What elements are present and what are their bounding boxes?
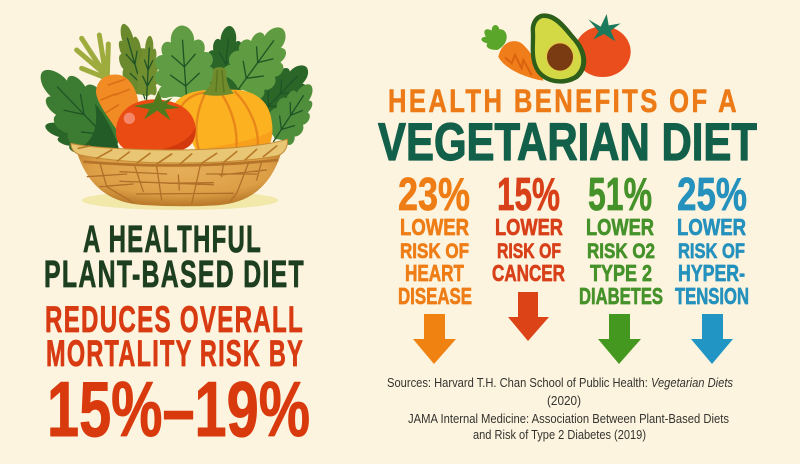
- subheading: reduces overall mortality risk by: MORTALITY RISK BY: [46, 333, 304, 374]
- icon: carrot, avocado and tomato: [481, 13, 631, 84]
- sources: [387, 376, 733, 442]
- stat column: hypertension: RISK OF: [678, 240, 745, 263]
- arrow: red down: [508, 292, 549, 341]
- arrow: green down: [598, 314, 641, 364]
- leafy greens: [21, 13, 326, 172]
- sources: (2020): [547, 394, 581, 408]
- carrot greens: [77, 35, 108, 79]
- heading: a healthful plant-based diet: PLANT-BASED DIET: [44, 254, 305, 296]
- subheading: reduces overall mortality risk by: [45, 299, 304, 374]
- heading: a healthful plant-based diet: A HEALTHFUL: [83, 219, 262, 261]
- basket bowl: [77, 152, 282, 206]
- basket shadow: [82, 191, 278, 210]
- stat column: hypertension: TENSION: [675, 283, 749, 309]
- stat column: heart disease: [398, 168, 472, 364]
- basket rim: [71, 139, 287, 164]
- arrow: orange down: [413, 314, 456, 364]
- sources: JAMA Internal Medicine: Association Between Plant-Based Diets: [408, 412, 729, 426]
- arrow: blue down: [691, 314, 733, 364]
- stat column: cancer: RISK OF: [497, 240, 561, 263]
- stat column: hypertension: LOWER: [677, 214, 746, 240]
- sources: Sources: Harvard T.H. Chan School of Public Health: Vegetarian Diets: [387, 376, 733, 390]
- big stat: 15%-19%: 15%–19%: [47, 365, 310, 453]
- heading: a healthful plant-based diet: [44, 219, 305, 296]
- stat column: heart disease: HEART: [405, 260, 464, 286]
- stat column: hypertension: 25%: [677, 168, 747, 220]
- stat column: cancer: CANCER: [492, 260, 565, 286]
- carrot: [96, 74, 138, 130]
- stat column: type 2 diabetes: DIABETES: [579, 283, 663, 309]
- stat column: hypertension: HYPER-: [678, 260, 745, 286]
- stat column: cancer: 15%: [497, 168, 560, 220]
- carrot: [481, 25, 543, 81]
- stat column: type 2 diabetes: [579, 168, 663, 364]
- pumpkin: [175, 67, 272, 152]
- stat column: heart disease: 23%: [398, 168, 470, 220]
- stat column: hypertension: [675, 168, 749, 364]
- stat column: heart disease: DISEASE: [398, 283, 472, 309]
- stat column: type 2 diabetes: LOWER: [586, 214, 654, 240]
- tomato: [116, 91, 196, 152]
- stat column: type 2 diabetes: 51%: [588, 168, 652, 220]
- stat column: cancer: LOWER: [495, 214, 563, 240]
- stat column: type 2 diabetes: TYPE 2: [590, 260, 652, 286]
- stat column: cancer: [492, 168, 565, 341]
- stat column: type 2 diabetes: RISK O2: [587, 240, 655, 263]
- stat column: heart disease: LOWER: [400, 214, 469, 240]
- avocado: [531, 13, 586, 84]
- subheading: reduces overall mortality risk by: REDUCES OVERALL: [45, 299, 304, 340]
- tomato: [575, 14, 631, 77]
- stat column: heart disease: RISK OF: [400, 240, 469, 263]
- sources: and Risk of Type 2 Diabetes (2019): [473, 428, 646, 442]
- icon: vegetable basket: [21, 13, 326, 210]
